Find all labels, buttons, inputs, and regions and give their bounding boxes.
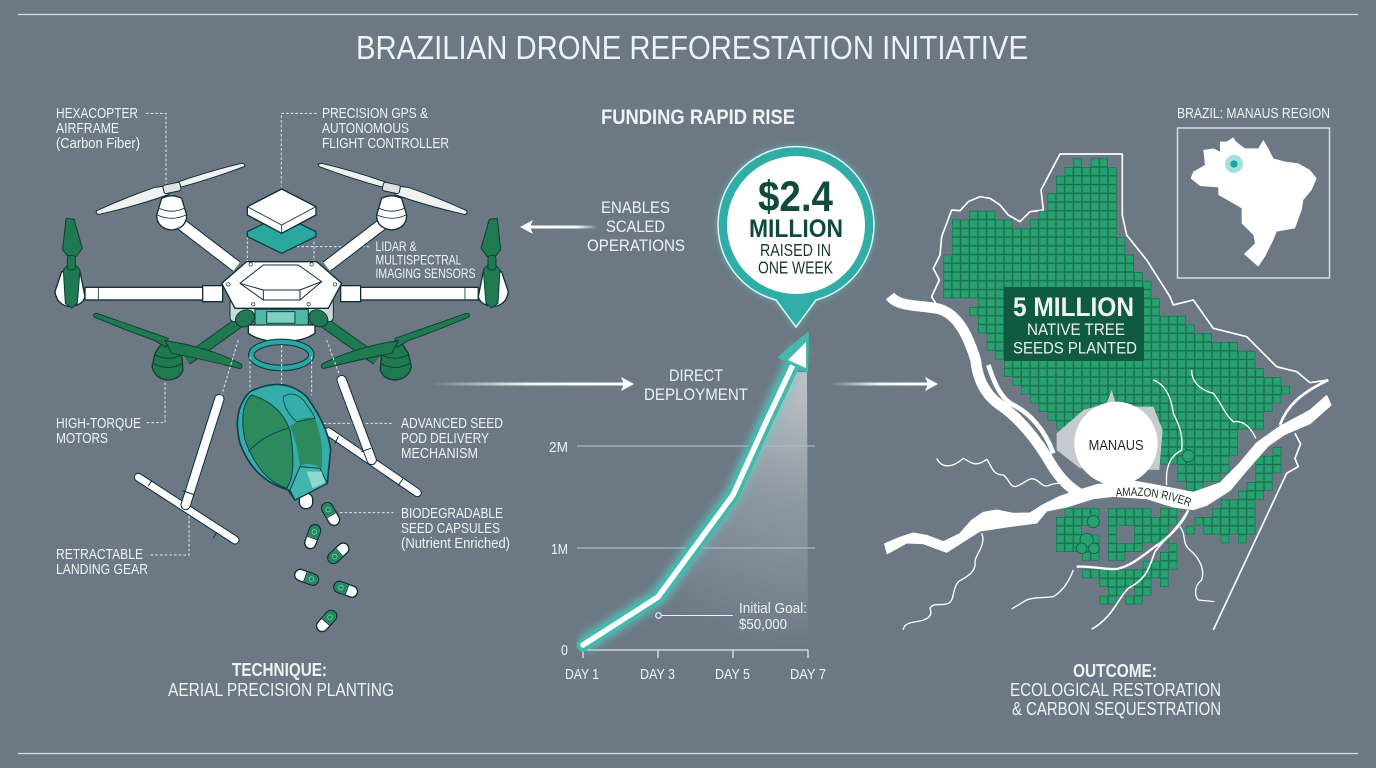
callout: $2.4 million bubble: RAISED IN [760, 240, 831, 260]
y axis labels: 2M [549, 440, 568, 456]
heading: funding: FUNDING RAPID RISE [601, 106, 795, 129]
y axis labels: 1M [551, 542, 568, 558]
y axis labels: 0 [561, 643, 568, 659]
caption: technique: TECHNIQUE: [232, 660, 327, 680]
arrow: direct deployment [430, 377, 634, 391]
label: seed pod mechanism: POD DELIVERY [401, 430, 489, 447]
callout: 5 million seeds: SEEDS PLANTED [1013, 338, 1137, 358]
Manaus circle: MANAUS [1089, 437, 1144, 454]
caption: outcome [1010, 661, 1221, 719]
caption: outcome: & CARBON SEQUESTRATION [1012, 698, 1221, 719]
label: GPS and flight controller [322, 105, 449, 152]
inset: Brazil locator map: BRAZIL: MANAUS REGION [1177, 106, 1330, 122]
title: BRAZILIAN DRONE REFORESTATION INITIATIVE [356, 29, 1028, 66]
Manaus marker [1225, 155, 1243, 173]
area under curve [583, 372, 808, 650]
callout leader lines lower [147, 340, 393, 555]
label: hexacopter airframe [56, 105, 140, 152]
region boundary line [932, 154, 1328, 630]
caption: outcome: OUTCOME: [1073, 661, 1157, 681]
label: lidar sensors: LIDAR & [376, 238, 417, 254]
callout: $2.4 million bubble: MILLION [749, 215, 843, 243]
label: lidar sensors [376, 238, 476, 281]
landing gear, pod and capsules [138, 340, 417, 634]
label: landing gear: RETRACTABLE [56, 546, 143, 563]
callout: $2.4 million bubble: $2.4 [758, 173, 833, 221]
river label: AMAZON RIVER [1116, 488, 1192, 506]
label: seed pod mechanism: MECHANISM [401, 445, 478, 462]
label: lidar sensors: IMAGING SENSORS [376, 265, 476, 281]
rivers [885, 296, 1331, 630]
label: hexacopter airframe: (Carbon Fiber) [56, 135, 140, 152]
x axis labels: DAY 1 [565, 666, 599, 683]
callout: 5 million seeds: 5 MILLION [1013, 292, 1134, 322]
label: landing gear: LANDING GEAR [56, 561, 148, 578]
inset: Brazil locator map [1177, 106, 1330, 278]
gridlines and axis [577, 446, 815, 548]
text: direct deployment [644, 366, 748, 404]
label: seed capsules [401, 505, 510, 552]
label: motors [56, 415, 141, 447]
initial goal annotation: $50,000 [739, 617, 787, 633]
map detail overlays [884, 292, 1332, 630]
text: enables scaled operations [587, 198, 685, 255]
text: direct deployment: DEPLOYMENT [644, 385, 748, 404]
panel: technique drone diagram [55, 113, 508, 634]
text: enables scaled operations: OPERATIONS [587, 236, 685, 255]
label: motors: HIGH-TORQUE [56, 415, 141, 432]
caption: technique [168, 660, 394, 700]
drone arms and rotors [55, 163, 508, 380]
callout: $2.4 million bubble [718, 147, 874, 327]
planted seed grid [943, 158, 1290, 605]
caption: outcome: ECOLOGICAL RESTORATION [1010, 679, 1221, 700]
label: GPS and flight controller: AUTONOMOUS [322, 120, 409, 137]
y axis labels [549, 440, 568, 659]
arrow: enables scaled operations [520, 220, 600, 234]
seed pod [237, 384, 331, 509]
label: GPS and flight controller: PRECISION GPS & [322, 105, 428, 122]
label: landing gear [56, 546, 148, 578]
text: enables scaled operations: SCALED [606, 217, 665, 236]
gimbal ring [251, 342, 311, 368]
label: hexacopter airframe: AIRFRAME [56, 120, 119, 137]
landing gear right [328, 380, 417, 493]
Brazil silhouette [1191, 137, 1317, 267]
callout leader lines upper [146, 113, 370, 263]
landing gear left [138, 399, 235, 540]
callout: 5 million seeds [1004, 287, 1144, 361]
seed capsules [293, 500, 359, 634]
x axis labels [565, 666, 826, 683]
tree cluster circles [1076, 450, 1194, 554]
initial goal annotation [656, 601, 807, 633]
x axis labels: DAY 7 [790, 666, 826, 683]
label: seed capsules: SEED CAPSULES [401, 520, 500, 537]
label: GPS and flight controller: FLIGHT CONTROLLER [322, 135, 449, 152]
Manaus circle [1074, 402, 1158, 485]
label: seed pod mechanism [401, 415, 503, 462]
callout: $2.4 million bubble: ONE WEEK [758, 258, 833, 278]
label: seed capsules: BIODEGRADABLE [401, 505, 503, 522]
x axis labels: DAY 5 [715, 666, 750, 683]
Manaus urban area [1057, 390, 1163, 470]
label: seed pod mechanism: ADVANCED SEED [401, 415, 503, 432]
caption: technique: AERIAL PRECISION PLANTING [168, 679, 394, 700]
drone illustration [55, 113, 508, 380]
initial goal annotation: Initial Goal: [739, 601, 807, 617]
text: enables scaled operations: ENABLES [601, 198, 670, 217]
label: motors: MOTORS [56, 430, 108, 447]
re-drawn green arm ends over the hub [232, 306, 331, 330]
x axis labels: DAY 3 [640, 666, 675, 683]
panel: reforestation map [884, 153, 1332, 630]
funding curve arrow [583, 333, 808, 645]
label: seed capsules: (Nutrient Enriched) [401, 535, 510, 552]
chart: funding line chart [549, 333, 826, 683]
central hub body [222, 262, 342, 342]
callout: 5 million seeds: NATIVE TREE [1027, 320, 1125, 339]
text: direct deployment: DIRECT [669, 366, 723, 385]
GPS flight controller module [247, 189, 316, 253]
arrow: to outcome [830, 377, 938, 391]
label: hexacopter airframe: HEXACOPTER [56, 105, 138, 122]
label: lidar sensors: MULTISPECTRAL [376, 252, 462, 268]
